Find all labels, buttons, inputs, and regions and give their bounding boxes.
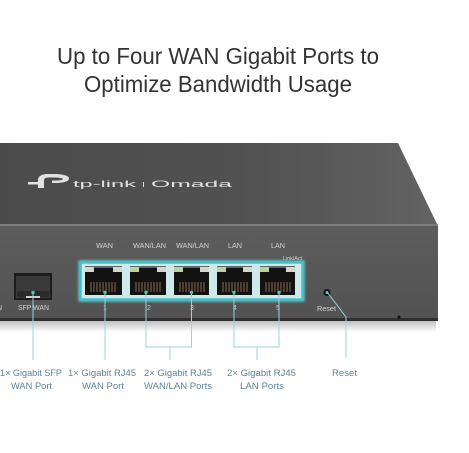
port 3 xyxy=(174,266,209,295)
port top labels: LAN xyxy=(228,243,242,250)
port numbers: 4 xyxy=(233,305,237,312)
logo xyxy=(28,174,232,189)
caption: SFP WAN: 1× Gigabit SFP xyxy=(0,368,62,379)
caption: RJ45 WAN: 1× Gigabit RJ45 xyxy=(68,368,136,379)
port 1 xyxy=(85,266,122,295)
port top labels xyxy=(96,243,303,262)
product text: Omada xyxy=(151,179,232,189)
top panel xyxy=(0,143,437,224)
title: Optimize Bandwidth Usage xyxy=(84,71,352,97)
caption: RJ45 LAN: 2× Gigabit RJ45 xyxy=(227,368,296,379)
callout dots xyxy=(31,291,281,294)
callout lines xyxy=(33,292,346,360)
caption: RJ45 LAN xyxy=(227,368,296,392)
caption: Reset: Reset xyxy=(332,368,357,379)
port top labels: WAN xyxy=(96,243,113,250)
front bottom edge xyxy=(0,318,438,321)
port numbers: 3 xyxy=(190,305,194,312)
front panel xyxy=(0,224,438,320)
port top labels: WAN/LAN xyxy=(133,243,166,250)
icon: tp-link logo xyxy=(28,174,69,188)
caption: RJ45 LAN: LAN Ports xyxy=(240,381,284,392)
caption: RJ45 WAN/LAN xyxy=(144,368,212,392)
caption: RJ45 WAN: WAN Port xyxy=(82,381,124,392)
reset label on device: Reset xyxy=(317,306,336,313)
port top labels: Link/Act xyxy=(283,256,303,262)
SFP labels: SFP WAN xyxy=(18,305,49,312)
port numbers: 5 xyxy=(276,305,280,312)
title xyxy=(57,43,379,97)
port captions xyxy=(0,368,357,392)
brand text: tp-link xyxy=(73,179,137,189)
front top edge xyxy=(0,224,438,226)
port numbers xyxy=(103,305,280,312)
port top labels: WAN/LAN xyxy=(176,243,209,250)
logo divider xyxy=(143,182,144,187)
port numbers: 1 xyxy=(103,305,107,312)
SFP port xyxy=(14,273,52,300)
caption: RJ45 WAN xyxy=(68,368,136,392)
ethernet ports xyxy=(85,266,295,295)
device shadow xyxy=(0,321,436,332)
caption: SFP WAN xyxy=(0,368,62,392)
port numbers: 2 xyxy=(147,305,151,312)
port highlight xyxy=(80,262,303,300)
caption: RJ45 WAN/LAN: WAN/LAN Ports xyxy=(144,381,212,392)
reset button xyxy=(324,289,330,296)
port 4 xyxy=(217,266,252,295)
foot notch xyxy=(398,316,400,318)
router device xyxy=(0,143,438,332)
port 2 xyxy=(130,266,166,295)
title: Up to Four WAN Gigabit Ports to xyxy=(57,43,379,69)
caption: SFP WAN: WAN Port xyxy=(11,381,52,392)
port 5 xyxy=(260,266,295,295)
caption: RJ45 WAN/LAN: 2× Gigabit RJ45 xyxy=(144,368,212,379)
port top labels: LAN xyxy=(271,243,285,250)
SFP labels xyxy=(0,305,49,312)
